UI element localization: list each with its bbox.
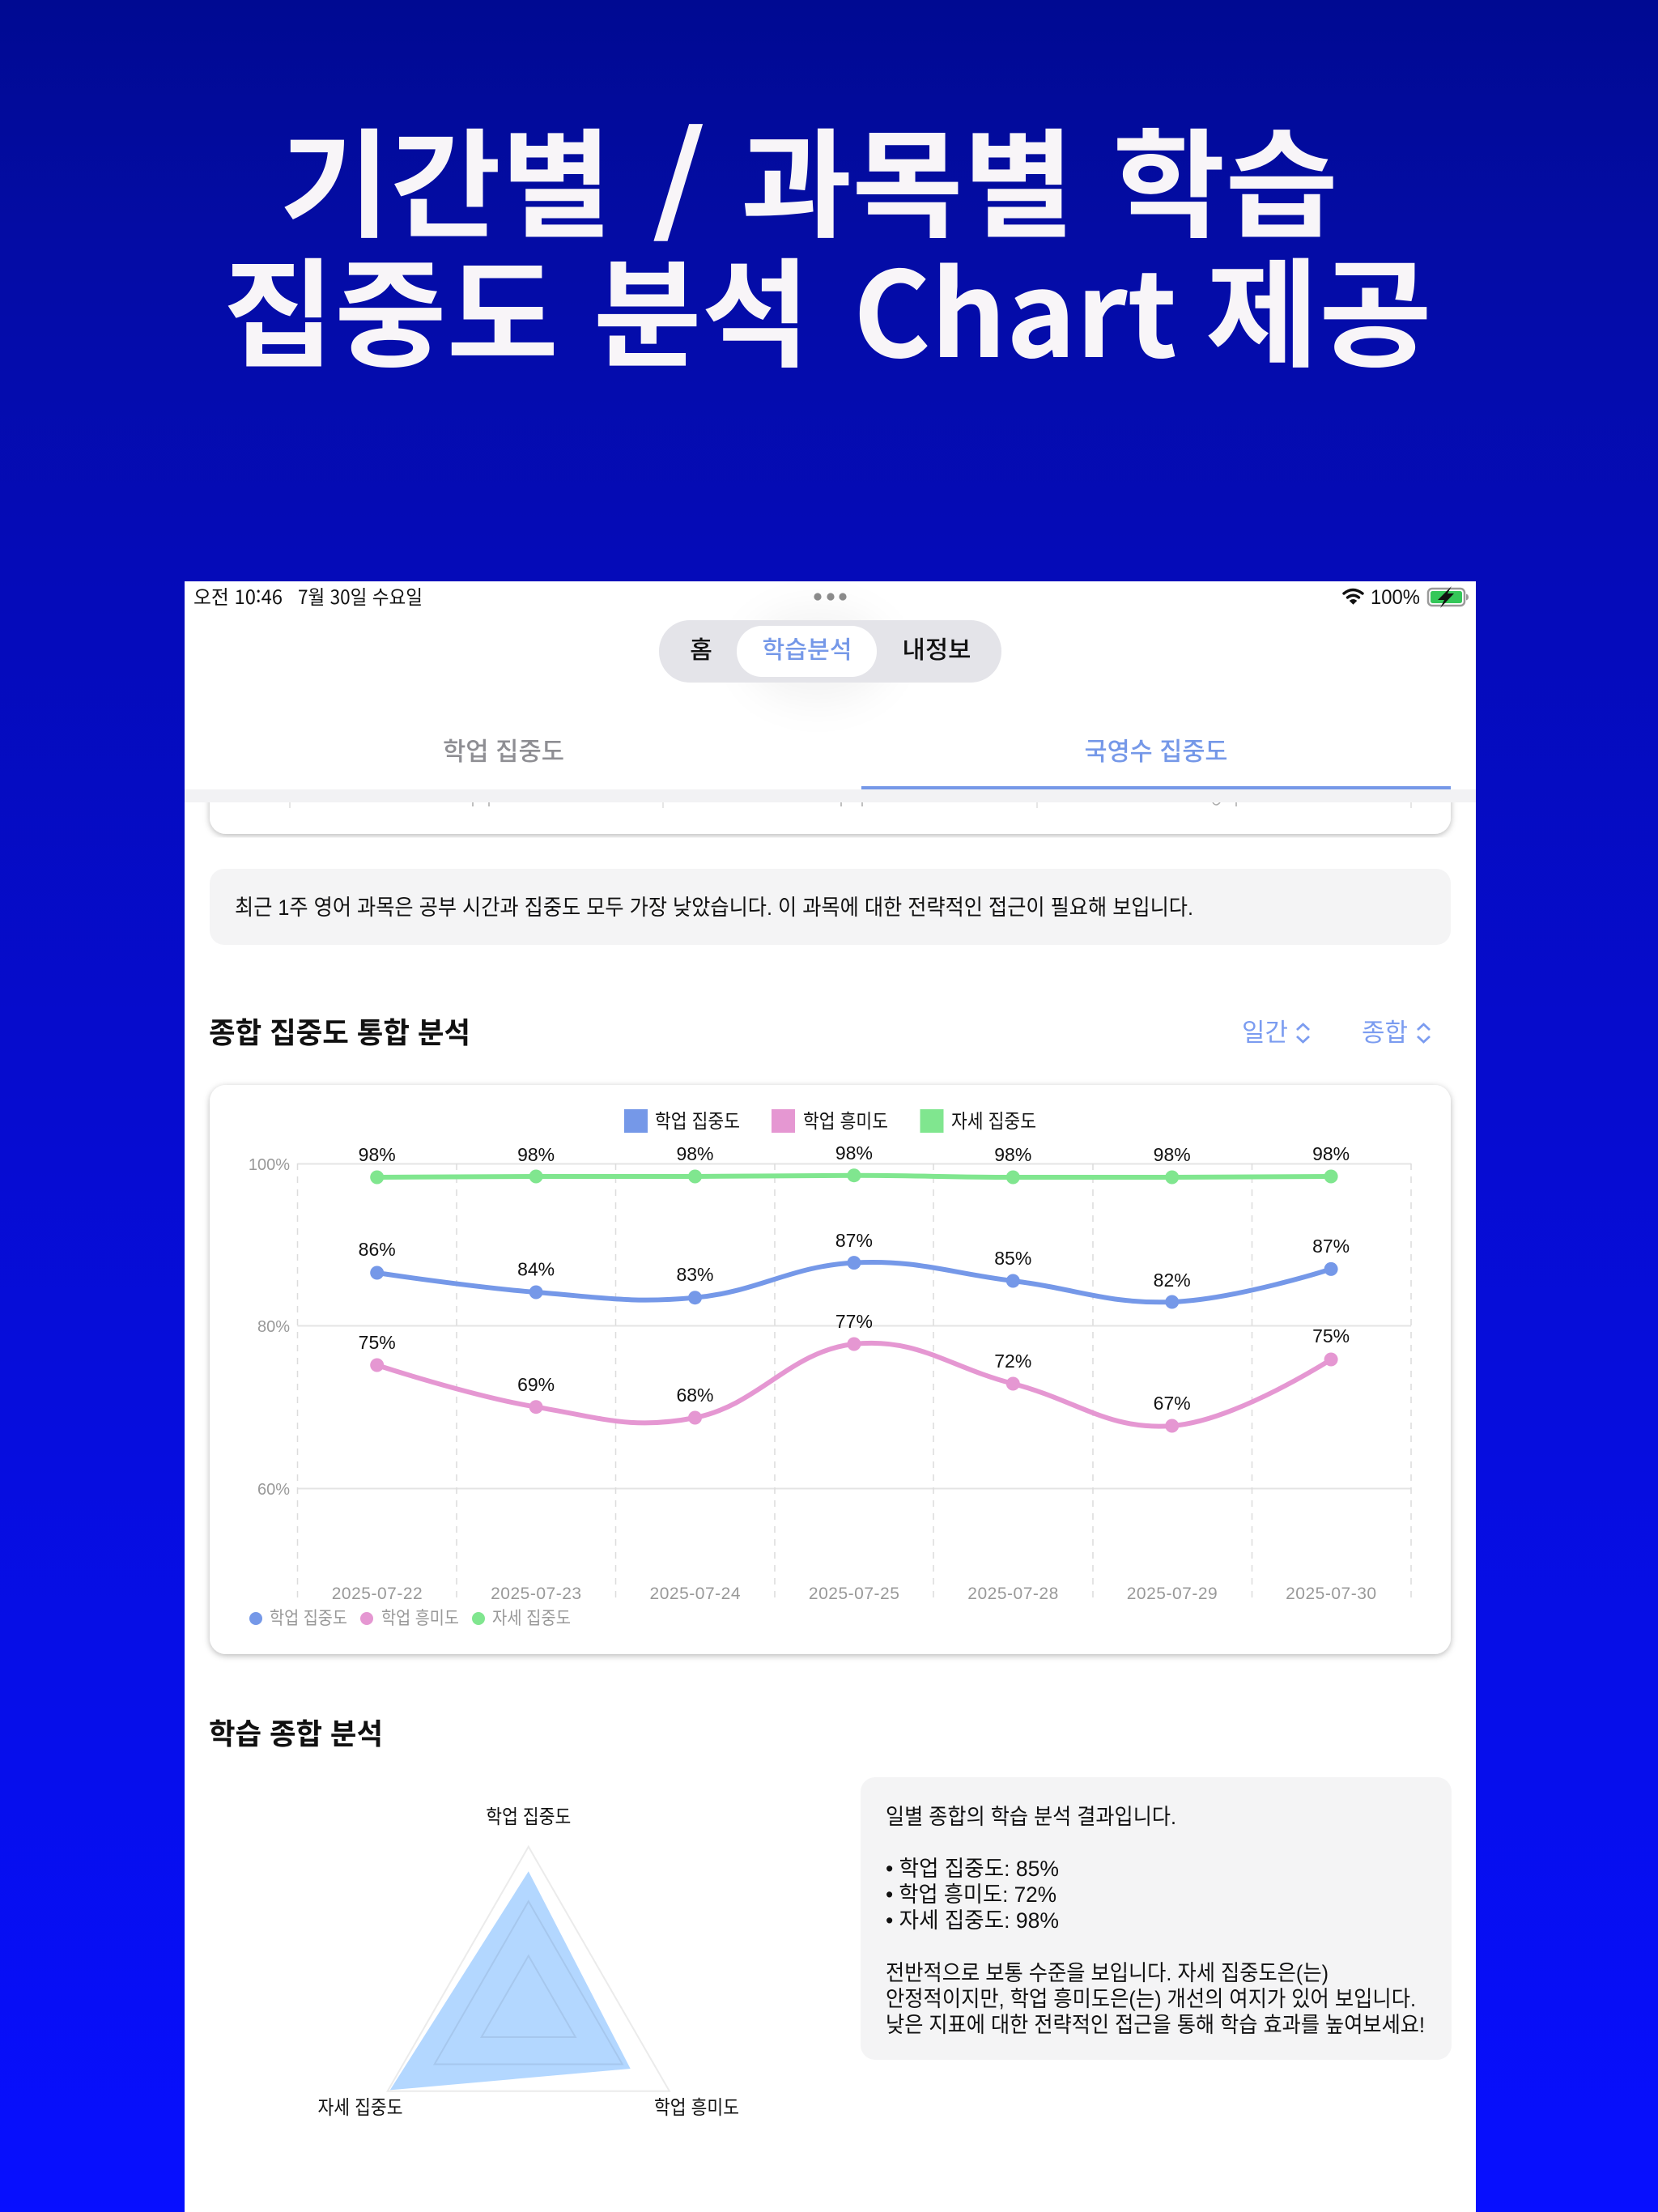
series: 학업 흥미도: 72% (994, 1351, 1031, 1372)
top legend (624, 1105, 1036, 1134)
x axis labels: 2025-07-23 (491, 1585, 581, 1603)
y axis labels: 80% (257, 1318, 290, 1336)
series: 학업 흥미도: 77% (835, 1311, 873, 1332)
series: 자세 집중도 (359, 1142, 1350, 1184)
x axis labels: 2025-07-24 (649, 1585, 741, 1603)
top legend: 자세 집중도 (951, 1105, 1036, 1134)
analysis summary panel: • 학업 흥미도: 72% (886, 1882, 1056, 1907)
series: 학업 흥미도 (359, 1311, 1350, 1433)
series: 학업 집중도: 85% (994, 1248, 1031, 1269)
series: 학업 집중도: 86% (359, 1239, 396, 1260)
y axis labels: 100% (249, 1156, 290, 1174)
type selector: 종합 (1362, 1012, 1408, 1049)
multitasking dots (814, 593, 847, 601)
series: 학업 흥미도: 67% (1154, 1393, 1191, 1414)
series: 자세 집중도: 98% (1154, 1144, 1191, 1165)
series: 학업 흥미도: 75% (1312, 1325, 1350, 1346)
series: 학업 흥미도: 68% (676, 1385, 714, 1406)
x axis labels (332, 1585, 1376, 1603)
bottom legend: 학업 흥미도 (381, 1604, 459, 1630)
series: 학업 집중도: 87% (1312, 1236, 1350, 1257)
insight note (210, 869, 1451, 945)
x axis labels: 2025-07-25 (809, 1585, 899, 1603)
analysis summary panel: 안정적이지만, 학업 흥미도은(는) 개선의 여지가 있어 보입니다. (886, 1987, 1416, 2011)
analysis summary panel: 낮은 지표에 대한 전략적인 접근을 통해 학습 효과를 높여보세요! (886, 2013, 1425, 2037)
series: 자세 집중도: 98% (994, 1144, 1031, 1165)
tabs: 국영수 집중도 (1085, 731, 1227, 768)
radar chart: 학업 흥미도 (654, 2091, 739, 2120)
x axis labels: 2025-07-29 (1127, 1585, 1218, 1603)
tabs (443, 731, 1451, 789)
radar data area (390, 1871, 631, 2090)
heading: 종합 집중도 통합 분석: 종합 집중도 통합 분석 (209, 1010, 470, 1052)
heading: 학습 종합 분석: 학습 종합 분석 (209, 1711, 383, 1753)
radar chart: 학업 집중도 (486, 1801, 571, 1829)
title: 집중도 (223, 221, 559, 392)
panel: line chart card (210, 1085, 1451, 1654)
title (223, 91, 1432, 392)
title: / (652, 91, 707, 262)
series: 학업 집중도: 82% (1154, 1270, 1191, 1291)
title: 분석 (593, 221, 810, 392)
pill soft shadow (745, 607, 891, 704)
y axis labels: 60% (257, 1481, 290, 1499)
y axis labels (249, 1156, 290, 1499)
title: 과목별 (741, 91, 1074, 262)
analysis summary panel: • 자세 집중도: 98% (886, 1908, 1059, 1933)
active tab underline (861, 786, 1451, 789)
title: Chart (853, 221, 1177, 392)
panel: app screen (185, 581, 1476, 2212)
status bar: 7월 30일 수요일 (298, 581, 423, 610)
bottom legend: 학업 집중도 (270, 1604, 347, 1630)
x axis labels: 2025-07-30 (1286, 1585, 1376, 1603)
series: 자세 집중도: 98% (1312, 1143, 1350, 1164)
period selector (1242, 1012, 1309, 1049)
title: 기간별 (279, 91, 612, 262)
series: 자세 집중도: 98% (676, 1143, 714, 1164)
status bar: 오전 10:46 (193, 581, 283, 610)
radar chart: 자세 집중도 (317, 2091, 403, 2120)
navigation header background (185, 581, 1476, 789)
series: 학업 흥미도: 69% (517, 1374, 555, 1395)
radar chart (317, 1801, 739, 2120)
type selector (1362, 1012, 1430, 1049)
icon: wifi (1344, 589, 1363, 604)
analysis summary panel: 일별 종합의 학습 분석 결과입니다. (886, 1805, 1176, 1829)
top legend: 학업 흥미도 (803, 1105, 888, 1134)
series: 학업 집중도: 84% (517, 1258, 555, 1279)
bottom legend (249, 1604, 571, 1630)
series: 학업 집중도: 87% (835, 1230, 873, 1251)
series: 자세 집중도: 98% (835, 1142, 873, 1163)
segmented navigation pill: 홈 (690, 630, 712, 666)
series: 자세 집중도: 98% (517, 1144, 555, 1165)
title: 학습 (1112, 91, 1338, 262)
segmented navigation pill: 내정보 (902, 630, 971, 666)
segmented navigation pill: 학습분석 (763, 630, 852, 666)
segmented navigation pill (659, 607, 1001, 704)
icon: charging battery (1428, 586, 1469, 608)
selected segment (737, 626, 877, 677)
status bar (193, 581, 1469, 610)
series: 학업 흥미도: 75% (359, 1332, 396, 1353)
analysis summary panel: 전반적으로 보통 수준을 보입니다. 자세 집중도은(는) (886, 1961, 1329, 1985)
header divider strip (185, 789, 1476, 802)
status bar: 100% (1371, 586, 1420, 609)
period selector: 일간 (1242, 1012, 1288, 1049)
x axis labels: 2025-07-22 (332, 1585, 423, 1603)
bottom legend: 자세 집중도 (492, 1604, 571, 1630)
analysis summary panel (861, 1777, 1452, 2060)
top legend: 학업 집중도 (655, 1105, 740, 1134)
x axis labels: 2025-07-28 (967, 1585, 1058, 1603)
series: 학업 집중도 (359, 1230, 1350, 1308)
analysis summary panel: • 학업 집중도: 85% (886, 1857, 1059, 1881)
title: 제공 (1205, 221, 1432, 392)
tabs: 학업 집중도 (443, 731, 564, 768)
insight note: 최근 1주 영어 과목은 공부 시간과 집중도 모두 가장 낮았습니다. 이 과목에 대한 전략적인 접근이 필요해 보입니다. (235, 895, 1193, 920)
card: previous chart cropped (210, 761, 1451, 834)
series: 학업 집중도: 83% (676, 1264, 714, 1285)
series: 자세 집중도: 98% (359, 1144, 396, 1165)
